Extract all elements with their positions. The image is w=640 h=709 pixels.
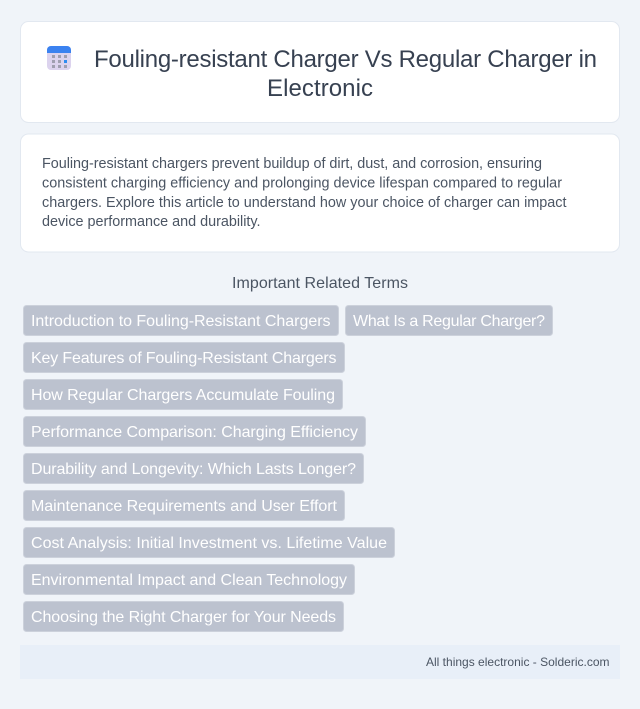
chip: Maintenance Requirements and User Effort — [31, 498, 338, 515]
chip — [346, 306, 552, 336]
text block: summary — [42, 156, 566, 230]
chip: Choosing the Right Charger for Your Needs — [31, 609, 336, 626]
text block: summary: Fouling-resistant chargers prevent buildup of dirt, dust, and corrosion, ensuring — [42, 156, 542, 172]
chip — [24, 306, 338, 336]
chip — [24, 490, 344, 520]
footer: All things electronic - Solderic.com — [426, 655, 610, 669]
title: Electronic — [267, 75, 373, 102]
chip — [24, 454, 364, 484]
chip — [24, 564, 354, 594]
title: Fouling-resistant Charger Vs Regular Charger in — [94, 46, 597, 73]
panel: summary paragraph — [20, 134, 620, 252]
panel: title card — [20, 22, 620, 122]
chip: Cost Analysis: Initial Investment vs. Lifetime Value — [31, 535, 387, 552]
chip — [24, 528, 394, 558]
text block: summary: device performance and durability. — [42, 214, 260, 230]
chip — [24, 342, 344, 372]
title — [94, 46, 597, 102]
chip: Environmental Impact and Clean Technology — [31, 572, 347, 589]
footer — [20, 645, 620, 679]
chip: Performance Comparison: Charging Efficiency — [31, 424, 358, 441]
chip — [24, 380, 342, 410]
chip — [24, 416, 366, 446]
chip: Key Features of Fouling-Resistant Chargers — [31, 350, 336, 367]
chip: How Regular Chargers Accumulate Fouling — [31, 387, 335, 404]
chip: What Is a Regular Charger? — [353, 313, 545, 330]
chip — [24, 602, 344, 632]
text block: summary: consistent charging efficiency and prolonging device lifespan compared to regular — [42, 176, 562, 192]
panel: related terms chips — [24, 306, 552, 632]
chip: Durability and Longevity: Which Lasts Longer? — [31, 461, 356, 478]
chip: Introduction to Fouling-Resistant Chargers — [31, 313, 330, 330]
icon: calendar — [47, 46, 71, 70]
heading: important related terms: Important Related Terms — [232, 275, 408, 292]
text block: summary: chargers. Explore this article to understand how your choice of charger can impact — [42, 195, 566, 211]
